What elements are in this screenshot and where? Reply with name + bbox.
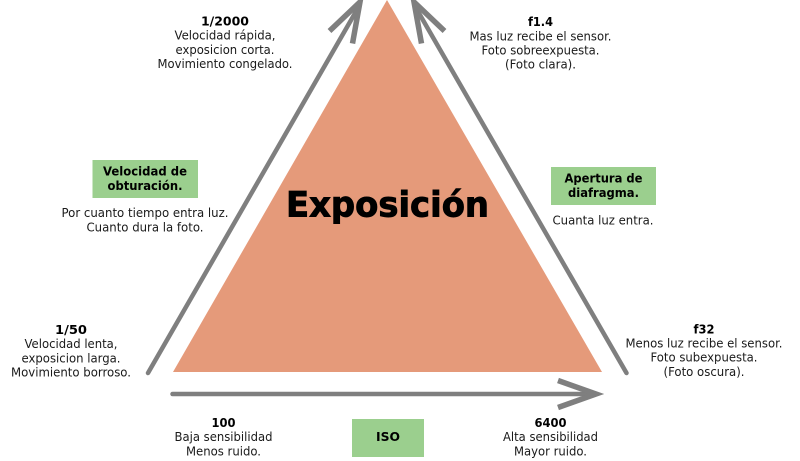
text: shutter speed description xyxy=(62,205,228,234)
arrow: shutter speed xyxy=(148,2,360,373)
text: shutter speed description: Cuanto dura la foto. xyxy=(86,220,204,234)
text: ISO 100 xyxy=(174,415,272,458)
text: 1/2000 xyxy=(158,14,292,71)
text: 1/50: exposicion larga. xyxy=(22,350,120,366)
text: 1/2000: exposicion corta. xyxy=(176,42,274,57)
text: 1/50: Velocidad lenta, xyxy=(24,336,118,351)
text: f32: Foto subexpuesta. xyxy=(650,350,758,364)
label: aperture: diafragma. xyxy=(568,185,639,200)
label: ISO: ISO xyxy=(376,429,400,444)
text: 1/2000: 1/2000 xyxy=(201,14,249,28)
text: f32 xyxy=(626,322,782,379)
text: ISO 6400 xyxy=(503,415,598,458)
label: aperture xyxy=(551,167,656,205)
text: 1/50 xyxy=(11,322,131,380)
text: f1.4: Mas luz recibe el sensor. xyxy=(470,28,612,44)
text: ISO 6400: Alta sensibilidad xyxy=(503,429,598,444)
text: 1/2000: Movimiento congelado. xyxy=(158,56,292,71)
text: ISO 100: 100 xyxy=(212,415,236,430)
text: 1/2000: Velocidad rápida, xyxy=(174,28,276,42)
text: 1/50: Movimiento borroso. xyxy=(11,364,131,380)
text: ISO 100: Baja sensibilidad xyxy=(174,429,272,444)
label: aperture: Apertura de xyxy=(564,170,642,186)
label: shutter speed: Velocidad de xyxy=(103,164,187,178)
text: 1/50: 1/50 xyxy=(55,322,87,337)
central triangle xyxy=(173,0,602,372)
label: shutter speed xyxy=(92,160,198,198)
text: aperture description: Cuanta luz entra. xyxy=(552,212,654,228)
arrow: aperture xyxy=(414,2,626,373)
arrow: ISO xyxy=(172,380,596,408)
text: f1.4: f1.4 xyxy=(528,14,553,29)
text: f32: Menos luz recibe el sensor. xyxy=(626,336,782,350)
text: ISO 6400: Mayor ruido. xyxy=(514,444,587,458)
text: ISO 6400: 6400 xyxy=(534,415,567,430)
text: shutter speed description: Por cuanto tiempo entra luz. xyxy=(62,205,228,220)
text: f1.4: (Foto clara). xyxy=(505,56,576,72)
text: f32: (Foto oscura). xyxy=(664,364,744,379)
text: f1.4: Foto sobreexpuesta. xyxy=(482,42,600,58)
label: ISO xyxy=(352,419,424,457)
text: f1.4 xyxy=(470,14,612,72)
text: ISO 100: Menos ruido. xyxy=(186,444,261,458)
label: shutter speed: obturación. xyxy=(108,178,182,193)
text: f32: f32 xyxy=(694,322,714,336)
title: Exposición xyxy=(286,186,489,226)
